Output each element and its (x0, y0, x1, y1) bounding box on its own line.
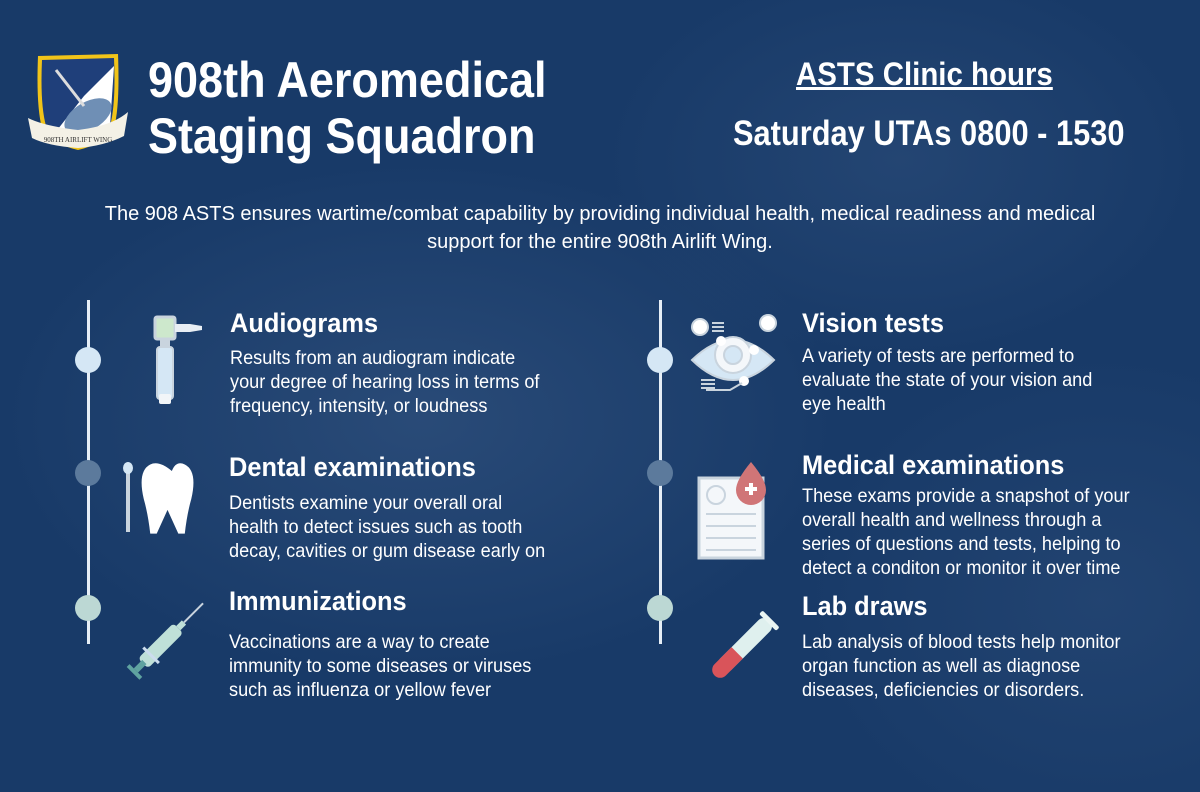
item: lab draws (802, 591, 1121, 701)
intro text: support for the entire 908th Airlift Wing. (427, 231, 773, 253)
heading: Audiograms (230, 308, 378, 338)
heading: Vision tests (802, 308, 944, 338)
text (802, 631, 1121, 701)
item: audiograms (230, 308, 540, 417)
icon: otoscope (154, 316, 202, 404)
emblem: 908TH AIRLIFT WING (44, 136, 112, 144)
text: diseases, deficiencies or disorders. (802, 679, 1084, 701)
text (802, 345, 1092, 415)
text: overall health and wellness through a (802, 509, 1101, 531)
text: These exams provide a snapshot of your (802, 485, 1130, 507)
text: organ function as well as diagnose (802, 655, 1080, 677)
title (148, 52, 547, 164)
icon: tooth (123, 462, 194, 534)
text: detect a conditon or monitor it over time (802, 557, 1121, 579)
item: vision (802, 308, 1092, 415)
text: decay, cavities or gum disease early on (229, 540, 545, 562)
text: series of questions and tests, helping to (802, 533, 1121, 555)
text: Vaccinations are a way to create (229, 631, 490, 653)
text: Lab analysis of blood tests help monitor (802, 631, 1121, 653)
item: dental (229, 452, 545, 562)
intro text (105, 203, 1095, 253)
text: evaluate the state of your vision and (802, 369, 1092, 391)
right timeline (647, 300, 673, 644)
clinic hours time: Saturday UTAs 0800 - 1530 (733, 114, 1124, 153)
item: immunizations (229, 586, 531, 701)
heading: Lab draws (802, 591, 928, 621)
text: frequency, intensity, or loudness (230, 395, 487, 417)
item: medical (802, 450, 1130, 579)
text: A variety of tests are performed to (802, 345, 1074, 367)
icon: test tube (712, 611, 779, 678)
text: immunity to some diseases or viruses (229, 655, 531, 677)
text: Dentists examine your overall oral (229, 492, 502, 514)
text (229, 492, 545, 562)
text (229, 631, 531, 701)
icon: syringe (126, 602, 204, 680)
text (802, 485, 1130, 579)
text: Results from an audiogram indicate (230, 347, 515, 369)
intro text: The 908 ASTS ensures wartime/combat capability by providing individual health, medical readiness and medical (105, 203, 1095, 225)
title: Staging Squadron (148, 108, 535, 164)
heading: Immunizations (229, 586, 407, 616)
clinic hours heading: ASTS Clinic hours (796, 56, 1053, 92)
heading: Dental examinations (229, 452, 476, 482)
text: such as influenza or yellow fever (229, 679, 491, 701)
icon: medical record (698, 462, 766, 560)
icon: eye (690, 314, 777, 391)
title: 908th Aeromedical (148, 52, 547, 108)
left timeline (75, 300, 101, 644)
text: eye health (802, 393, 886, 415)
text: health to detect issues such as tooth (229, 516, 522, 538)
text: your degree of hearing loss in terms of (230, 371, 539, 393)
emblem (28, 54, 128, 150)
text (230, 347, 540, 417)
heading: Medical examinations (802, 450, 1064, 480)
